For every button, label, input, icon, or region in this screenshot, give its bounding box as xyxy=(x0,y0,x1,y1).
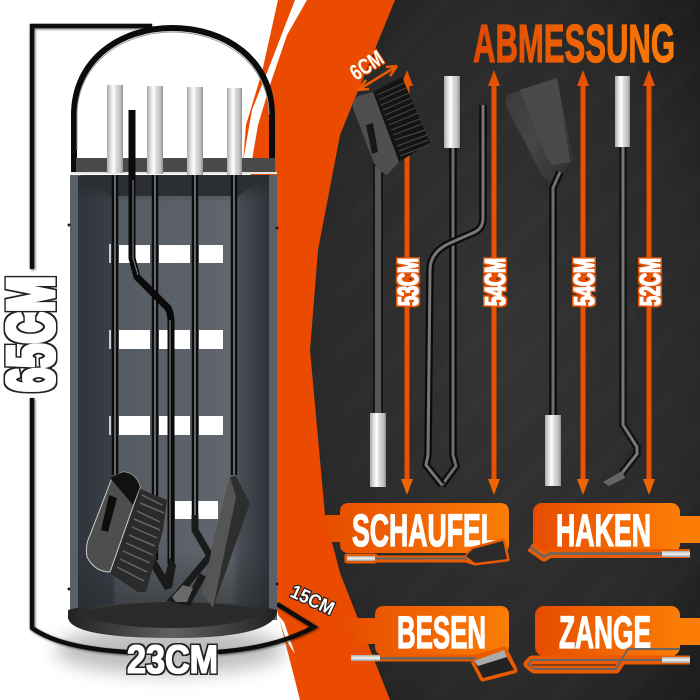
icon: hook xyxy=(530,547,690,557)
panel: Zange xyxy=(528,606,700,669)
arrow: brush length xyxy=(401,70,413,495)
window edge highlights xyxy=(109,244,111,435)
orange brush band xyxy=(240,0,700,700)
dark panel xyxy=(310,0,700,700)
tool: tongs xyxy=(426,76,483,485)
label: 23CM: 23CM xyxy=(127,638,218,682)
label: 54CM shovel: 54CM xyxy=(569,258,601,306)
arrow: tongs length xyxy=(488,70,500,495)
rivets xyxy=(68,224,278,590)
shovel and poker in stand xyxy=(172,476,250,608)
label: 53CM: 53CM xyxy=(393,258,425,306)
tool: brush xyxy=(353,77,430,487)
base xyxy=(68,602,277,638)
arrow: shovel length xyxy=(577,70,589,495)
orange brush sliver xyxy=(243,0,295,162)
icon: shovel xyxy=(347,541,507,563)
tool: poker xyxy=(603,76,637,486)
label: 15CM: 15CM xyxy=(287,581,337,620)
arch xyxy=(74,28,272,172)
tool: shovel xyxy=(506,78,573,486)
panel: Schaufel xyxy=(322,503,509,563)
tong tip xyxy=(150,558,176,590)
arrows xyxy=(401,70,655,495)
silver handles xyxy=(107,85,242,175)
label: 6CM: 6CM xyxy=(345,45,388,85)
label: 54CM tongs: 54CM xyxy=(480,258,512,306)
brush in stand xyxy=(86,472,167,592)
icon: brush xyxy=(351,650,514,678)
window slots xyxy=(119,245,223,519)
arrow: brush width xyxy=(358,66,397,90)
stand back panel xyxy=(78,176,269,616)
white brush streak lower xyxy=(278,615,295,654)
arrow: poker length xyxy=(643,70,655,495)
icon: tongs xyxy=(528,649,690,669)
shelf underside xyxy=(80,175,270,196)
stand body xyxy=(70,175,277,620)
label: 52CM: 52CM xyxy=(635,258,667,306)
soft floor shadow xyxy=(55,626,285,674)
panel: Schaufel: SCHAUFEL xyxy=(352,505,497,556)
shelf xyxy=(76,158,275,172)
tool rods in stand xyxy=(115,110,234,565)
fireplace stand xyxy=(68,28,278,638)
panel: Besen xyxy=(340,606,514,678)
panel: Besen: BESEN xyxy=(397,607,486,658)
dimension line: height and width xyxy=(32,26,314,652)
length labels xyxy=(393,258,667,306)
